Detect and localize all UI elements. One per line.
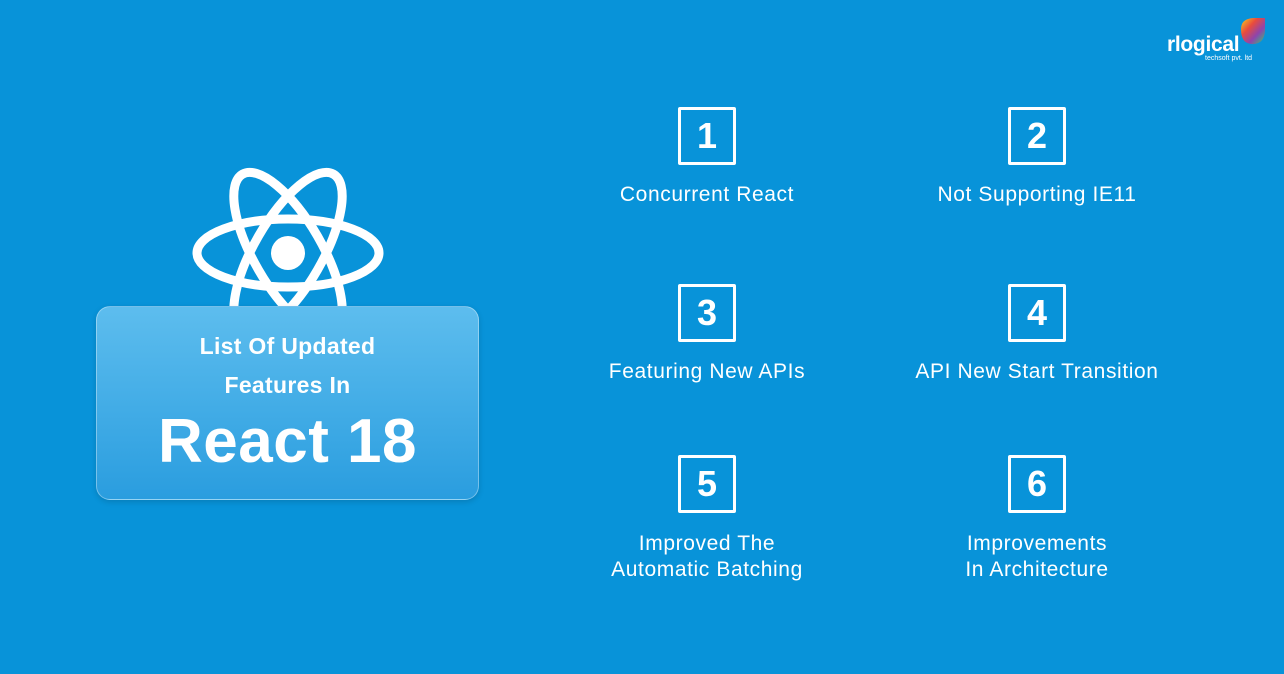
- feature 6: In Architecture: [965, 558, 1109, 581]
- title panel: [96, 306, 479, 500]
- feature 4: API New Start Transition: [915, 360, 1159, 383]
- subtitle: [200, 333, 375, 398]
- icon: react atom: [192, 168, 384, 306]
- feature 6: 6: [1027, 463, 1047, 504]
- logo: techsoft pvt. ltd: [1205, 55, 1252, 62]
- feature 5: 5: [697, 463, 717, 504]
- feature 6: [965, 455, 1109, 581]
- feature 1: Concurrent React: [620, 183, 794, 206]
- feature 2: Not Supporting IE11: [938, 183, 1136, 206]
- feature 1: 1: [697, 115, 717, 156]
- feature 3: Featuring New APIs: [609, 360, 805, 383]
- feature 5: Improved The: [639, 532, 775, 555]
- feature 5: [611, 455, 803, 581]
- feature 4: [915, 284, 1159, 383]
- feature 4: 4: [1027, 292, 1047, 333]
- feature 1: [620, 107, 794, 206]
- feature 2: 2: [1027, 115, 1047, 156]
- subtitle: Features In: [224, 372, 350, 398]
- feature 2: [938, 107, 1136, 206]
- main title: React 18: [158, 407, 417, 476]
- logo text: rlogical: [1167, 33, 1239, 56]
- feature 5: Automatic Batching: [611, 558, 803, 581]
- subtitle: List Of Updated: [200, 333, 375, 359]
- logo icon: [1241, 18, 1265, 44]
- feature 6: Improvements: [967, 532, 1107, 555]
- feature 3: [609, 284, 805, 383]
- logo: [1167, 18, 1265, 62]
- feature 3: 3: [697, 292, 717, 333]
